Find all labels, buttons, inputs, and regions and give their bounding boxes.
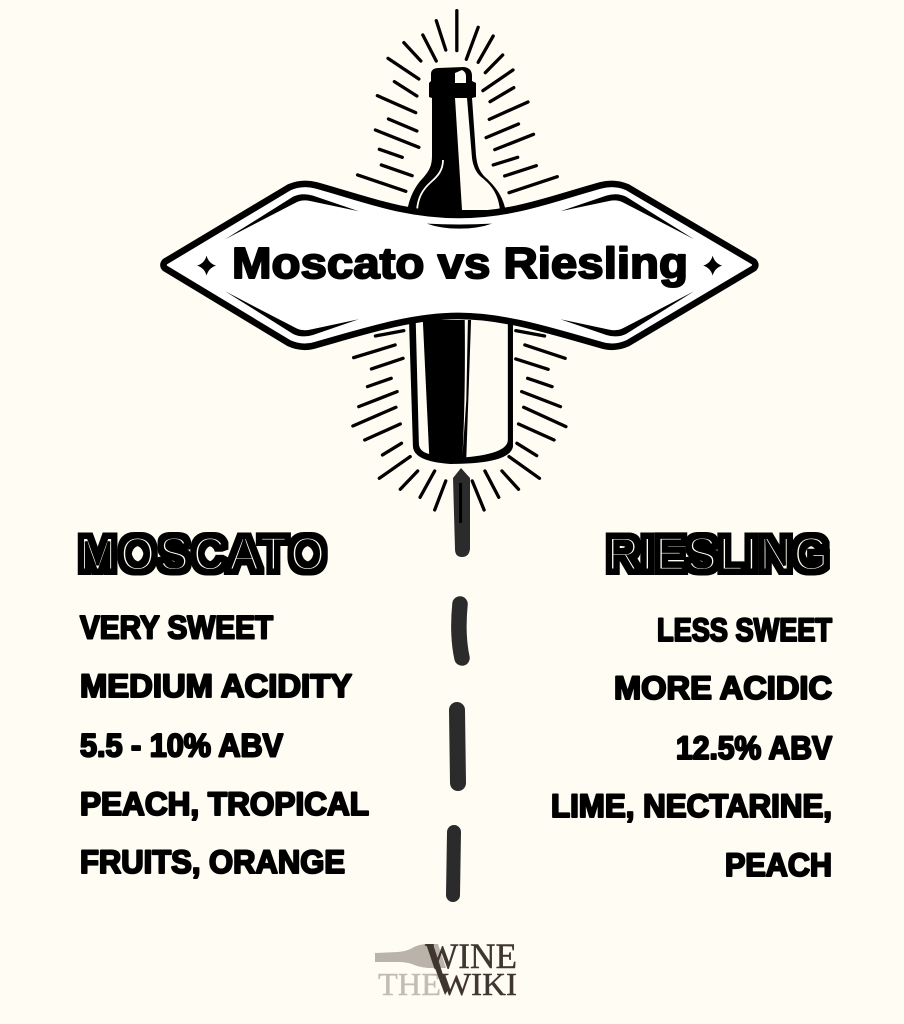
logo: The Wine Wiki	[375, 936, 517, 1002]
Moscato traits: FRUITS, ORANGE	[80, 844, 345, 880]
emblem: bottle with banner	[163, 11, 755, 510]
logo: The Wine Wiki: WIKI	[440, 966, 517, 1002]
Riesling traits	[551, 612, 833, 883]
Riesling traits: LESS SWEET	[657, 612, 832, 648]
icon: radiating rays	[353, 11, 566, 510]
icon: bottle body	[409, 320, 513, 464]
logo: The Wine Wiki: THE	[378, 966, 441, 1002]
icon: bottle neck	[407, 67, 506, 212]
Riesling traits: LIME, NECTARINE,	[551, 788, 832, 824]
Riesling traits: PEACH	[725, 847, 832, 883]
Moscato traits: MEDIUM ACIDITY	[80, 668, 352, 704]
Moscato traits: VERY SWEET	[80, 610, 273, 646]
heading: Moscato: MOSCATO	[79, 528, 325, 580]
heading: Riesling: RIESLING	[607, 528, 828, 580]
Moscato traits	[80, 610, 369, 880]
Moscato traits: PEACH, TROPICAL	[80, 786, 369, 822]
Riesling traits: 12.5% ABV	[676, 730, 833, 766]
Moscato traits: 5.5 - 10% ABV	[80, 728, 284, 764]
banner	[163, 184, 755, 347]
Riesling traits: MORE ACIDIC	[614, 670, 832, 706]
title: Moscato vs Riesling	[232, 239, 688, 288]
dashed centre divider	[453, 468, 470, 895]
logo: The Wine Wiki: WINE	[425, 936, 517, 976]
